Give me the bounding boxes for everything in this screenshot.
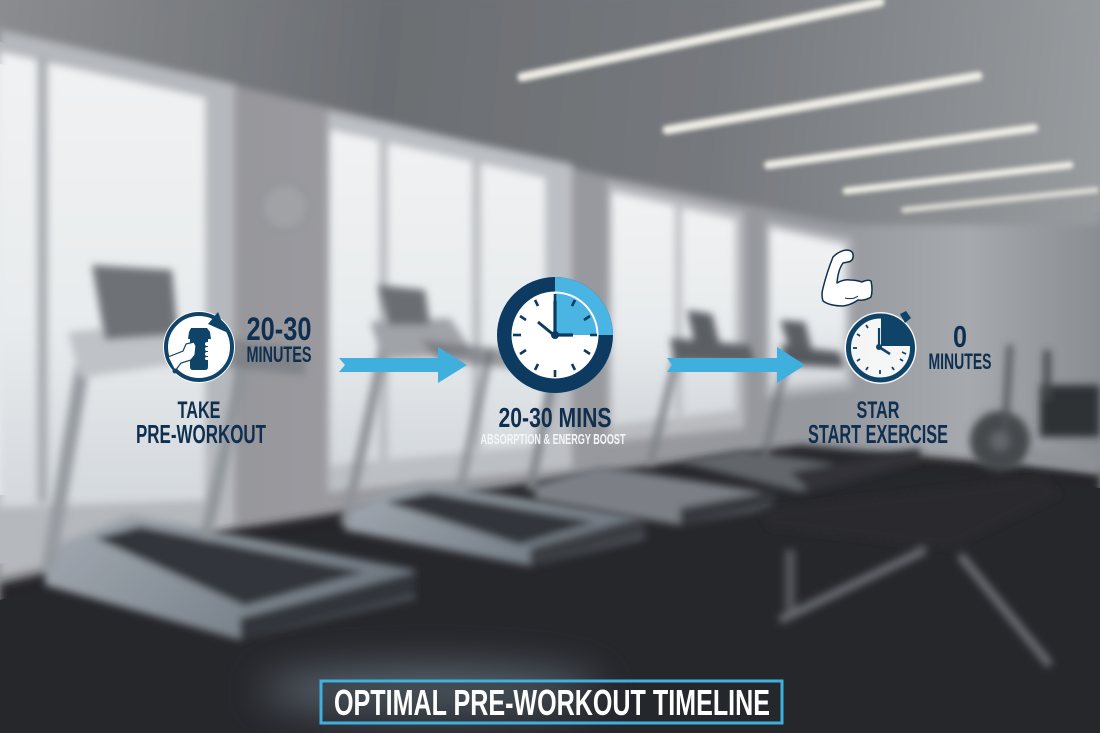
label: absorption and energy boost: ABSORPTION & ENERGY BOOST — [480, 432, 626, 448]
icon: stopwatch timer — [844, 311, 916, 384]
label: 20-30 minutes: 20-30 — [246, 311, 312, 347]
arrow: step 2 to step 3 — [667, 347, 805, 383]
step 3: start exercise — [808, 250, 992, 449]
title banner: OPTIMAL PRE-WORKOUT TIMELINE — [334, 682, 770, 723]
label: 0 minutes: MINUTES — [928, 349, 992, 374]
ceiling lights — [522, 2, 1096, 210]
step 2: absorption — [480, 277, 626, 448]
treadmill 2 — [345, 285, 645, 566]
title banner — [321, 681, 782, 723]
label: 20-30 minutes: MINUTES — [246, 342, 312, 367]
label: 20-30 minutes — [246, 311, 312, 367]
label: 0 minutes — [928, 319, 992, 374]
label: take pre-workout: TAKE — [178, 397, 220, 424]
label: star start exercise — [808, 397, 948, 449]
label: take pre-workout — [136, 397, 266, 449]
icon: clock with quarter highlighted — [497, 277, 613, 393]
label: 20-30 mins: 20-30 MINS — [498, 402, 612, 433]
icon: shaker bottle in hand with circular arrow — [163, 311, 235, 383]
treadmills 3 and 4 — [530, 310, 920, 525]
treadmill 1 — [45, 265, 415, 640]
bench and equipment — [760, 345, 1100, 665]
arrow: step 1 to step 2 — [339, 347, 467, 383]
step 1: take pre-workout — [136, 311, 312, 449]
label: take pre-workout: PRE-WORKOUT — [136, 419, 266, 449]
label: star start exercise: STAR — [856, 397, 900, 424]
label: star start exercise: START EXERCISE — [808, 419, 948, 449]
icon: flexed bicep — [822, 250, 872, 306]
floor — [0, 445, 1100, 733]
label: 0 minutes: 0 — [953, 319, 967, 354]
